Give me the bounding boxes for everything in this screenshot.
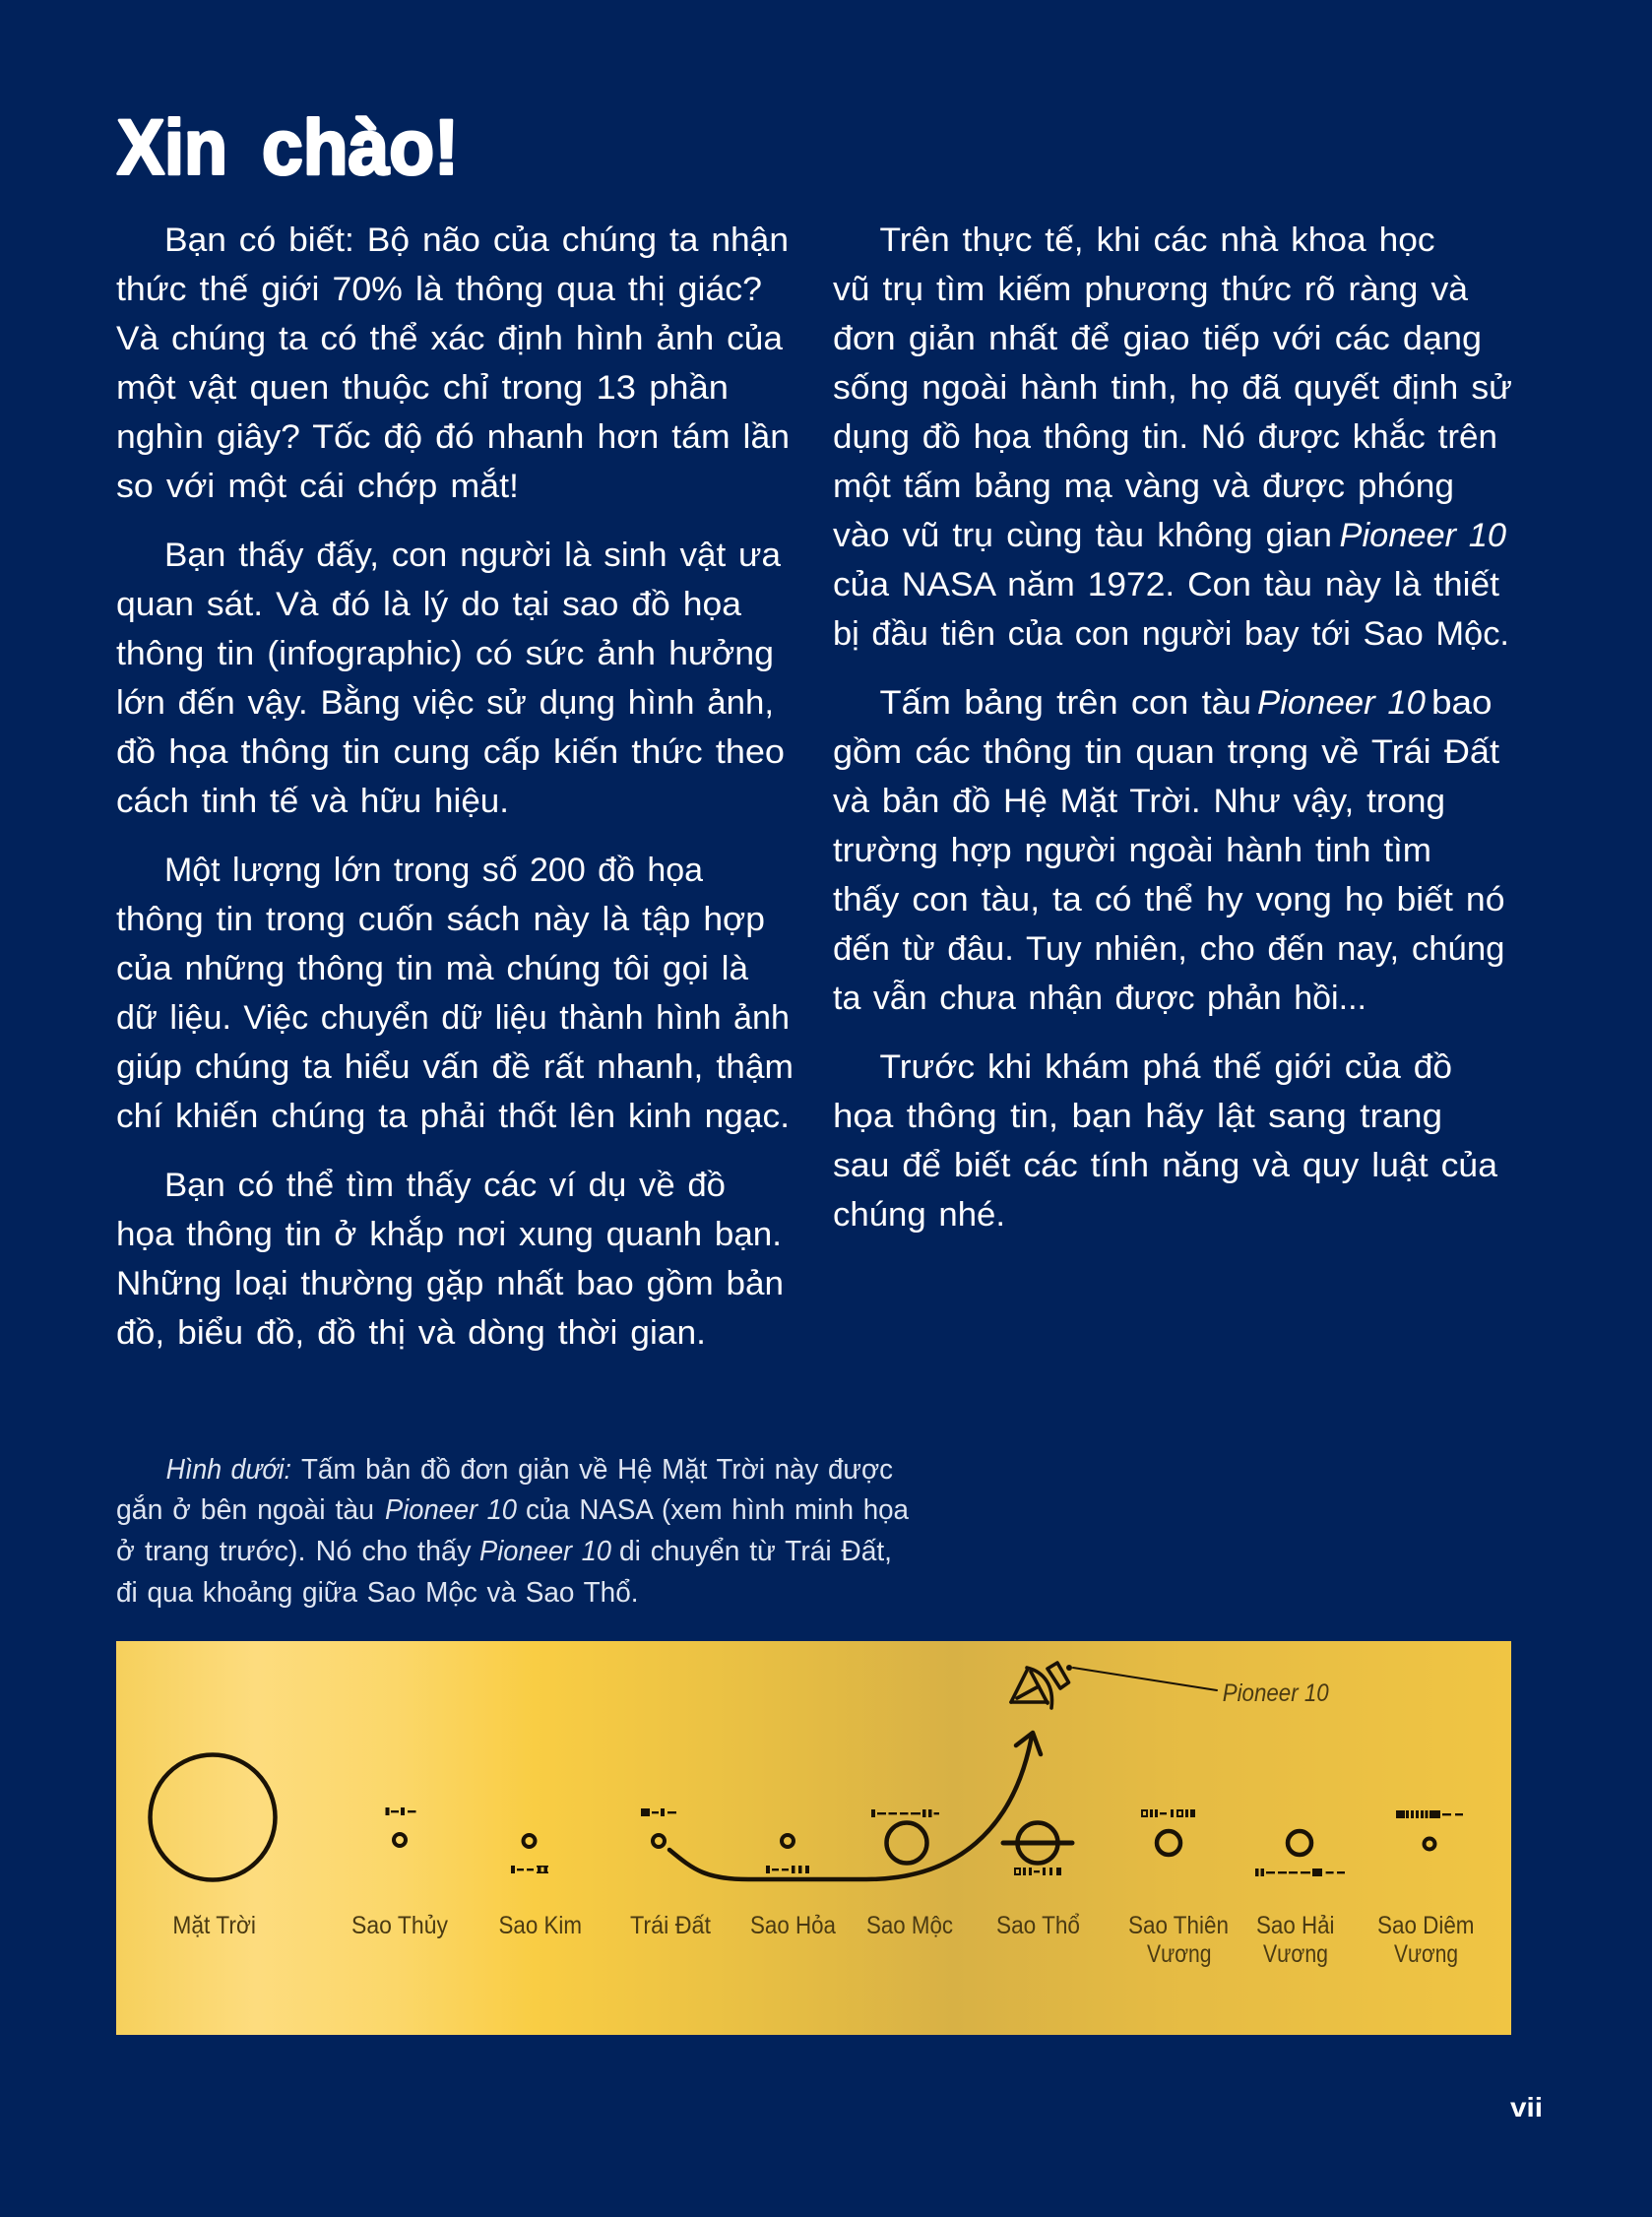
paragraph: left 2: Bạn thấy đấy, con người là sinh vật ưa (164, 537, 781, 574)
planet labels: Sao Hải (1256, 1912, 1335, 1939)
title (117, 102, 459, 191)
paragraph: right 1: bị đầu tiên của con người bay tới Sao Mộc. (833, 615, 1509, 653)
paragraph: left 1 (116, 222, 790, 505)
paragraph: left 2: thông tin (infographic) có sức ảnh hưởng (116, 635, 774, 672)
paragraph: right 2: Tấm bảng trên con tàu (880, 684, 1251, 722)
planet labels (172, 1912, 1474, 1968)
paragraph: left 1: thức thế giới 70% là thông qua thị giác? (116, 271, 762, 308)
paragraph: left 3 (116, 852, 794, 1135)
paragraph: left 2: cách tinh tế và hữu hiệu. (116, 783, 509, 820)
paragraph: right 1: một tấm bảng mạ vàng và được phóng (833, 468, 1454, 505)
paragraph: right 1: sống ngoài hành tinh, họ đã quyết định sử (833, 369, 1512, 407)
paragraph: left 4: Bạn có thể tìm thấy các ví dụ về đồ (164, 1167, 726, 1204)
caption: ở trang trước). Nó cho thấy (116, 1536, 472, 1567)
paragraph: right 2: Pioneer 10 (1257, 684, 1426, 722)
paragraph: left 1: nghìn giây? Tốc độ đó nhanh hơn tám lần (116, 418, 790, 456)
caption (116, 1454, 909, 1609)
paragraph: right 1: Pioneer 10 (1339, 517, 1506, 554)
paragraph: right 1: vào vũ trụ cùng tàu không gian (833, 517, 1332, 554)
paragraph: right 2: đến từ đâu. Tuy nhiên, cho đến nay, chúng (833, 930, 1504, 968)
paragraph: right 3: họa thông tin, bạn hãy lật sang trang (833, 1098, 1442, 1135)
planet labels: Sao Thiên (1128, 1912, 1229, 1939)
caption: đi qua khoảng giữa Sao Mộc và Sao Thổ. (116, 1577, 638, 1609)
planet: Sun (150, 1754, 276, 1880)
caption: Tấm bản đồ đơn giản về Hệ Mặt Trời này được (301, 1454, 893, 1486)
paragraph: left 2 (116, 537, 785, 820)
caption: của NASA (xem hình minh họa (526, 1494, 909, 1526)
planet: Saturn with ring (1003, 1823, 1072, 1875)
paragraph: left 1: so với một cái chớp mắt! (116, 468, 519, 505)
panel: gold solar system plaque (116, 1641, 1511, 2035)
label: Pioneer 10: Pioneer 10 (1223, 1679, 1329, 1707)
planet labels: Sao Hỏa (750, 1912, 836, 1939)
paragraph: left 4: Những loại thường gặp nhất bao gồm bản (116, 1265, 784, 1302)
paragraph: left 4: đồ, biểu đồ, đồ thị và dòng thời gian. (116, 1314, 706, 1352)
paragraph: right 1: dụng đồ họa thông tin. Nó được khắc trên (833, 418, 1497, 456)
paragraph: right 3: chúng nhé. (833, 1196, 1005, 1234)
paragraph: right 2: và bản đồ Hệ Mặt Trời. Như vậy, trong (833, 783, 1445, 820)
planet: Mercury (386, 1807, 415, 1846)
caption: gắn ở bên ngoài tàu (116, 1494, 374, 1526)
paragraph: right 3: Trước khi khám phá thế giới của đồ (880, 1048, 1452, 1086)
paragraph: left 3: giúp chúng ta hiểu vấn đề rất nhanh, thậm (116, 1048, 794, 1086)
paragraph: right 1: vũ trụ tìm kiếm phương thức rõ ràng và (833, 271, 1468, 308)
paragraph: left 1: Và chúng ta có thể xác định hình ảnh của (116, 320, 783, 357)
planet: Jupiter (871, 1809, 939, 1863)
planet labels: Sao Mộc (866, 1912, 953, 1939)
paragraph: left 4 (116, 1167, 784, 1352)
text column: right (833, 222, 1512, 1234)
paragraph: right 2: ta vẫn chưa nhận được phản hồi... (833, 980, 1366, 1017)
planet: Earth (641, 1808, 676, 1847)
planet labels: Mặt Trời (172, 1912, 256, 1939)
paragraph: left 3: chí khiến chúng ta phải thốt lên kinh ngạc. (116, 1098, 790, 1135)
paragraph: right 3 (833, 1048, 1497, 1234)
planet labels: Vương (1147, 1940, 1211, 1968)
paragraph: left 3: Một lượng lớn trong số 200 đồ họa (164, 852, 703, 889)
planet labels: Sao Thổ (996, 1912, 1080, 1939)
paragraph: left 1: một vật quen thuộc chỉ trong 13 phần (116, 369, 729, 407)
planet: Uranus (1141, 1809, 1195, 1855)
paragraph: right 1: đơn giản nhất để giao tiếp với các dạng (833, 320, 1482, 357)
planet labels: Sao Thủy (351, 1912, 448, 1939)
planet labels: Vương (1263, 1940, 1328, 1968)
planet labels: Sao Diêm (1377, 1912, 1475, 1939)
planet: Venus (511, 1835, 548, 1873)
paragraph: right 2: trường hợp người ngoài hành tinh tìm (833, 832, 1431, 869)
paragraph: right 2 (833, 684, 1504, 1017)
paragraph: right 2: thấy con tàu, ta có thể hy vọng họ biết nó (833, 881, 1504, 918)
paragraph: left 2: quan sát. Và đó là lý do tại sao đồ họa (116, 586, 741, 623)
paragraph: left 4: họa thông tin ở khắp nơi xung quanh bạn. (116, 1216, 782, 1253)
paragraph: left 3: dữ liệu. Việc chuyển dữ liệu thành hình ảnh (116, 999, 790, 1037)
gold plate background (116, 1641, 1511, 2035)
planet: Pluto (1396, 1810, 1463, 1849)
title: Xin (117, 102, 227, 191)
title: chào! (262, 102, 459, 191)
icon: Pioneer 10 spacecraft (1011, 1663, 1217, 1708)
planet labels: Sao Kim (498, 1912, 582, 1939)
planet: Mars (766, 1835, 809, 1873)
page number: vii (1510, 2092, 1543, 2122)
caption: Pioneer 10 (479, 1536, 611, 1567)
paragraph: right 2: bao (1431, 684, 1493, 722)
planet labels: Trái Đất (630, 1912, 711, 1939)
caption: Hình dưới: (166, 1454, 291, 1486)
paragraph: right 3: sau để biết các tính năng và quy luật của (833, 1147, 1497, 1184)
caption: di chuyển từ Trái Đất, (619, 1536, 892, 1567)
caption: Pioneer 10 (385, 1494, 517, 1526)
planet: Neptune (1255, 1831, 1345, 1876)
paragraph: right 1: Trên thực tế, khi các nhà khoa học (880, 222, 1435, 259)
paragraph: right 1: của NASA năm 1972. Con tàu này là thiết (833, 566, 1500, 603)
planet labels: Vương (1394, 1940, 1458, 1968)
paragraph: left 2: lớn đến vậy. Bằng việc sử dụng hình ảnh, (116, 684, 774, 722)
paragraph: left 1: Bạn có biết: Bộ não của chúng ta nhận (164, 222, 789, 259)
paragraph: right 2: gồm các thông tin quan trọng về Trái Đất (833, 733, 1500, 771)
text column: left (116, 222, 794, 1352)
paragraph: left 3: thông tin trong cuốn sách này là tập hợp (116, 901, 765, 938)
paragraph: left 2: đồ họa thông tin cung cấp kiến thức theo (116, 733, 785, 771)
paragraph: right 1 (833, 222, 1512, 653)
arrow: Pioneer 10 trajectory (669, 1733, 1041, 1879)
paragraph: left 3: của những thông tin mà chúng tôi gọi là (116, 950, 748, 987)
